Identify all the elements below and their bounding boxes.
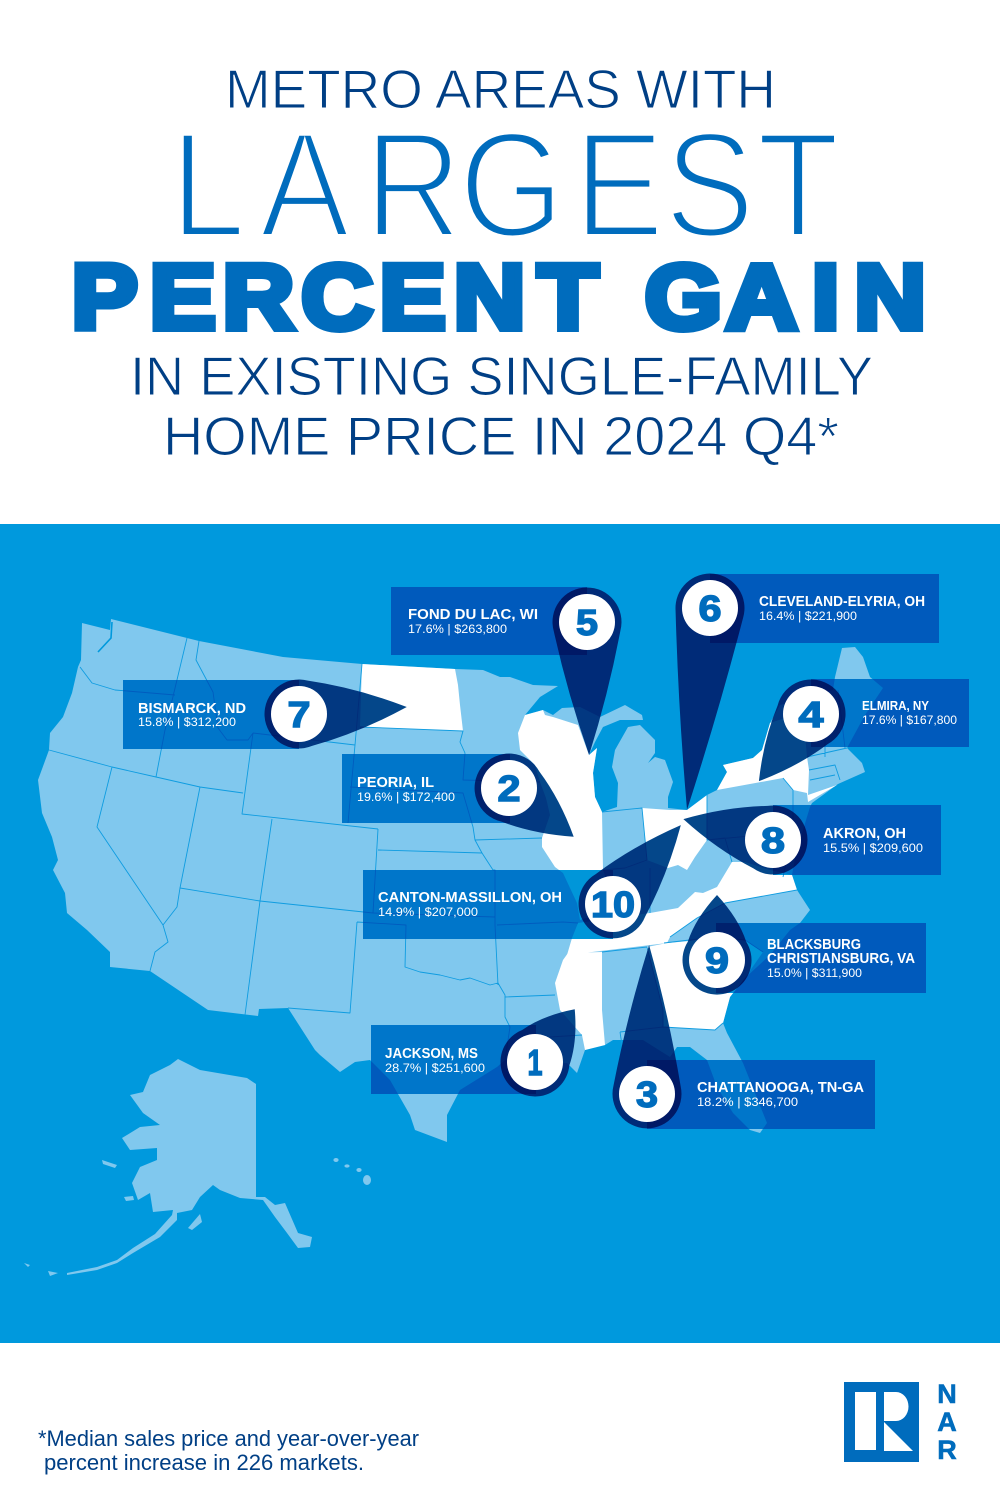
metro stats: 19.6% | $172,400	[357, 792, 455, 804]
metro stats: 28.7% | $251,600	[385, 1063, 485, 1075]
pin circle	[559, 594, 615, 650]
logo square	[844, 1382, 919, 1462]
map pin	[732, 666, 859, 802]
title	[71, 58, 926, 467]
map pin	[676, 786, 814, 881]
pin circle	[585, 876, 641, 932]
metro stats: 15.0% | $311,900	[767, 968, 862, 980]
map: Alaska	[24, 1059, 312, 1276]
map: United States	[38, 619, 883, 1142]
rank number: 8	[761, 820, 785, 861]
map pin	[564, 803, 707, 953]
rank number: 3	[636, 1074, 658, 1115]
rank number: 2	[498, 768, 520, 809]
callout 2: Peoria	[342, 740, 594, 864]
pin circle	[507, 1034, 563, 1090]
title line: in existing single-family: IN EXISTING SINGLE-FAMILY	[130, 345, 873, 407]
metro name: BISMARCK, ND	[138, 701, 246, 717]
puget sound	[98, 622, 112, 652]
map pin	[487, 989, 602, 1110]
map: Hawaii	[333, 1158, 371, 1185]
title line: percent gain: PERCENT GAIN	[71, 246, 926, 349]
highlighted state: North Dakota	[360, 664, 463, 731]
rank number: 1	[528, 1042, 542, 1083]
metro name: AKRON, OH	[823, 826, 906, 842]
logo: Realtor R mark and NAR	[844, 1379, 957, 1465]
state borders	[49, 638, 847, 1060]
metro name: CANTON-MASSILLON, OH	[378, 890, 562, 906]
pin circle	[689, 932, 745, 988]
map pin	[653, 570, 748, 814]
logo letter R leg	[884, 1422, 913, 1451]
logo letter I	[855, 1392, 876, 1450]
label box	[363, 870, 613, 939]
title line: home price: HOME PRICE IN 2024 Q4*	[163, 405, 839, 467]
highlighted state: New York	[717, 712, 837, 802]
Alaska islands	[24, 1160, 202, 1276]
pin circle	[783, 686, 839, 742]
callout 10: Canton-Massillon	[363, 803, 707, 953]
highlighted states: Georgia and South Carolina	[647, 937, 763, 1030]
metro name, second line: CHRISTIANSBURG, VA	[767, 951, 915, 967]
label box	[391, 587, 587, 655]
metro stats: 15.5% | $209,600	[823, 843, 923, 855]
map pin	[262, 673, 409, 751]
callout 5: Fond du Lac	[391, 587, 624, 756]
lower 48 silhouette	[38, 619, 883, 1142]
label box	[773, 805, 941, 875]
metro name: JACKSON, MS	[385, 1046, 478, 1062]
highlighted states: Tennessee and Virginia	[567, 862, 797, 955]
highlighted state: Mississippi	[555, 952, 605, 1050]
rank number: 9	[705, 940, 729, 981]
label box	[811, 679, 969, 747]
metro stats: 14.9% | $207,000	[378, 907, 478, 919]
metro name: CHATTANOOGA, TN-GA	[697, 1080, 865, 1096]
callout 9: Blacksburg-Christiansburg	[682, 895, 926, 995]
callout 3: Chattanooga	[612, 945, 875, 1129]
metro name: FOND DU LAC, WI	[408, 607, 538, 623]
label box	[710, 574, 939, 643]
pin circle	[619, 1066, 675, 1122]
callout 7: Bismarck	[123, 673, 409, 751]
rank number: 4	[798, 694, 824, 735]
metro stats: 18.2% | $346,700	[697, 1097, 798, 1109]
metro stats: 15.8% | $312,200	[138, 717, 236, 729]
footnote	[38, 1426, 419, 1475]
metro name: PEORIA, IL	[357, 775, 434, 791]
title line: largest: LARGEST	[170, 102, 839, 269]
map pin	[461, 740, 594, 864]
highlighted state: Ohio	[642, 795, 707, 870]
highlighted states: Wisconsin and Illinois	[518, 710, 610, 920]
metro stats: 17.6% | $263,800	[408, 624, 507, 636]
pin circle	[271, 686, 327, 742]
callout 8: Akron	[676, 786, 941, 881]
logo text R: R	[937, 1435, 957, 1465]
label box	[342, 754, 510, 823]
metro stats: 17.6% | $167,800	[862, 715, 957, 727]
callout 6: Cleveland-Elyria	[653, 570, 939, 814]
label box	[123, 680, 299, 749]
callout 4: Elmira	[732, 666, 969, 802]
metro stats: 16.4% | $221,900	[759, 611, 857, 623]
label box	[716, 923, 926, 993]
map pin	[612, 945, 684, 1129]
rank number: 7	[288, 694, 310, 735]
map pin	[682, 895, 752, 995]
logo letter R bowl	[884, 1392, 908, 1421]
logo text N: N	[937, 1379, 957, 1409]
footnote line 1: *Median sales price and year-over-year	[38, 1426, 419, 1451]
rank number: 6	[698, 588, 722, 629]
logo text A: A	[937, 1407, 957, 1437]
label box	[647, 1060, 875, 1129]
rank number: 5	[576, 602, 598, 643]
metro name: ELMIRA, NY	[862, 698, 929, 713]
metro name: BLACKSBURG	[767, 937, 861, 953]
metro name: CLEVELAND-ELYRIA, OH	[759, 594, 925, 610]
map pin	[552, 587, 624, 756]
panel: map background	[0, 524, 1000, 1343]
pin circle	[745, 812, 801, 868]
footnote line 2: percent increase in 226 markets.	[44, 1450, 364, 1475]
rank number: 10	[591, 884, 635, 925]
title line: metro areas with: METRO AREAS WITH	[225, 58, 776, 120]
pin circle	[682, 580, 738, 636]
callout 1: Jackson	[371, 989, 602, 1110]
label box	[371, 1025, 536, 1094]
pin circle	[481, 760, 537, 816]
